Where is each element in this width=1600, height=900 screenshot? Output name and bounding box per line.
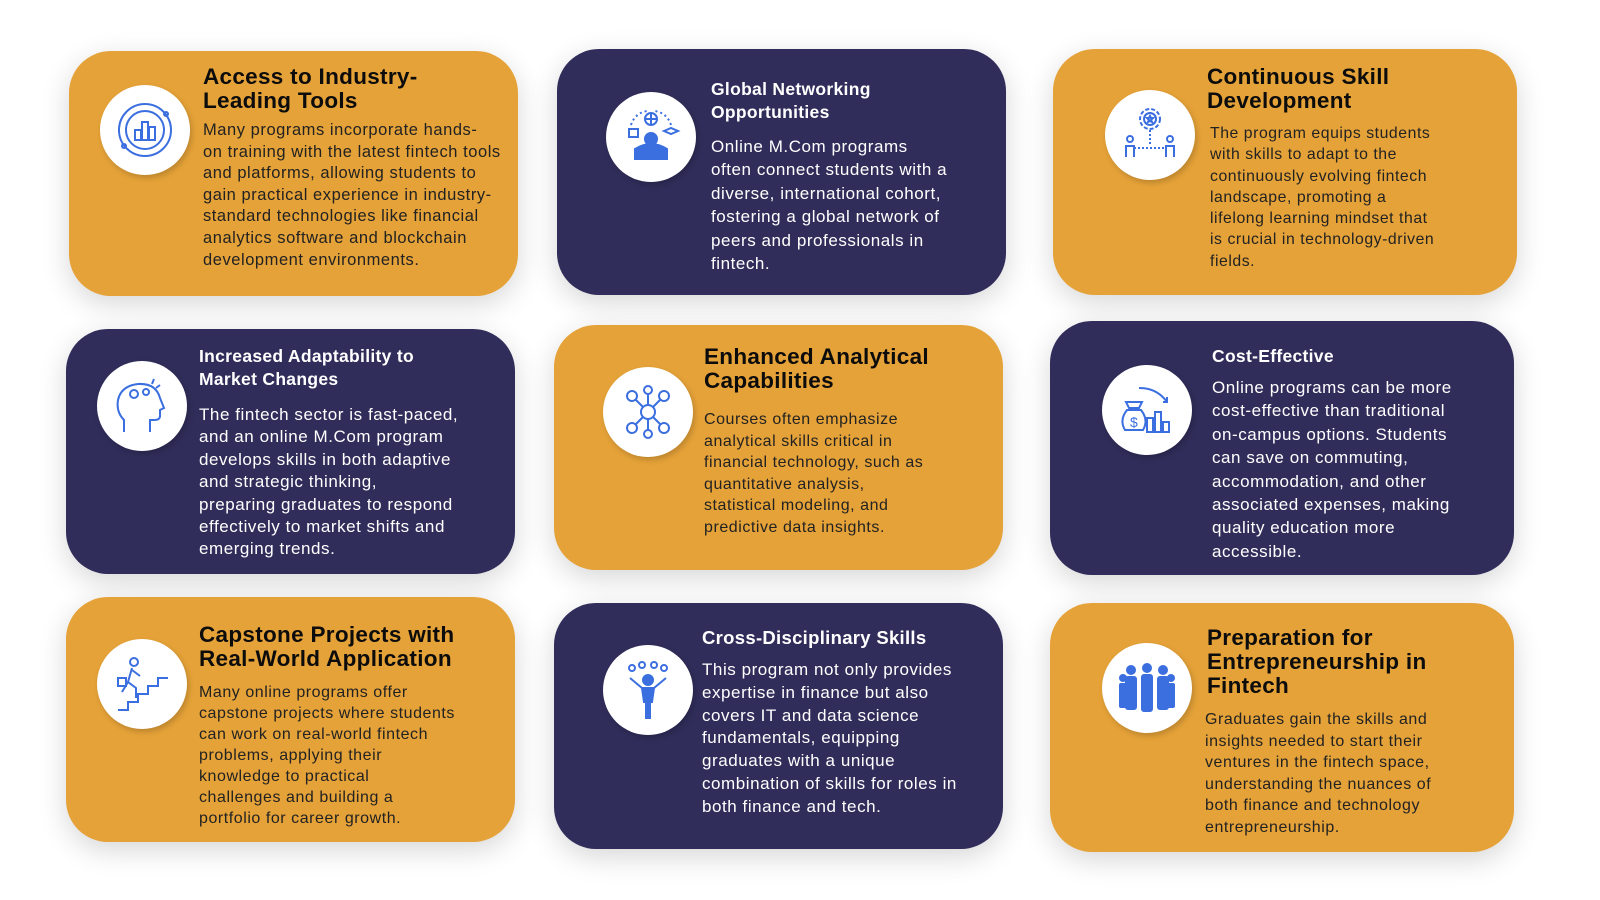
body text bbox=[704, 411, 923, 536]
title: Capabilities bbox=[704, 368, 834, 393]
card 4: Increased Adaptability bbox=[66, 329, 515, 574]
body text: can work on real-world fintech bbox=[199, 726, 428, 743]
body text: combination of skills for roles in bbox=[702, 774, 957, 793]
card 5: Enhanced Analytical Capabilities bbox=[554, 325, 1003, 570]
icon: head with ideas bbox=[97, 361, 187, 451]
body text: peers and professionals in bbox=[711, 231, 924, 250]
body text: standard technologies like financial bbox=[203, 207, 479, 225]
icon: skill gear with people bbox=[1105, 90, 1195, 180]
body text: insights needed to start their bbox=[1205, 733, 1423, 750]
body text bbox=[711, 137, 947, 273]
title bbox=[1207, 64, 1389, 113]
body text: Many online programs offer bbox=[199, 684, 408, 701]
body text: cost-effective than traditional bbox=[1212, 401, 1445, 420]
title: Global Networking bbox=[711, 79, 871, 99]
card 2: Global Networking Opportunities bbox=[557, 49, 1006, 295]
body text: development environments. bbox=[203, 251, 419, 269]
title bbox=[199, 346, 414, 389]
body text: financial technology, such as bbox=[704, 454, 923, 471]
title: Access to Industry- bbox=[203, 64, 418, 89]
body text: knowledge to practical bbox=[199, 768, 369, 785]
body text: Online programs can be more bbox=[1212, 378, 1452, 397]
body text: analytics software and blockchain bbox=[203, 229, 467, 247]
title: Market Changes bbox=[199, 369, 338, 389]
icon: team group bbox=[1102, 643, 1192, 733]
body text bbox=[702, 660, 957, 816]
icon: global networking bbox=[606, 92, 696, 182]
body text bbox=[1205, 711, 1431, 836]
body text bbox=[1212, 378, 1452, 561]
title: Real-World Application bbox=[199, 646, 452, 671]
body text: expertise in finance but also bbox=[702, 683, 929, 702]
title bbox=[711, 79, 871, 122]
body text: understanding the nuances of bbox=[1205, 776, 1431, 793]
card 7: Capstone Projects bbox=[66, 597, 515, 842]
card 1: Access to Industry-Leading Tools bbox=[69, 51, 518, 296]
body text: Courses often emphasize bbox=[704, 411, 898, 428]
icon: climbing stairs bbox=[97, 639, 187, 729]
body text: is crucial in technology-driven bbox=[1210, 231, 1434, 248]
body text: with skills to adapt to the bbox=[1210, 146, 1397, 163]
icon: person juggling skills bbox=[603, 645, 693, 735]
body text bbox=[203, 121, 501, 269]
title bbox=[203, 64, 418, 113]
body text: develops skills in both adaptive bbox=[199, 450, 451, 469]
title: Cross-Disciplinary Skills bbox=[702, 627, 926, 648]
title: Preparation for bbox=[1207, 625, 1373, 650]
body text: continuously evolving fintech bbox=[1210, 168, 1427, 185]
body text: The program equips students bbox=[1210, 125, 1430, 142]
card 9: Preparation for Entrepreneurship bbox=[1050, 603, 1514, 852]
icon: money bag and chart bbox=[1102, 365, 1192, 455]
title: Entrepreneurship in bbox=[1207, 649, 1426, 674]
title: Fintech bbox=[1207, 673, 1289, 698]
body text: emerging trends. bbox=[199, 539, 335, 558]
body text bbox=[199, 684, 455, 827]
body text: lifelong learning mindset that bbox=[1210, 210, 1428, 227]
icon: network of people bbox=[603, 367, 693, 457]
body text: challenges and building a bbox=[199, 789, 393, 806]
body text: and an online M.Com program bbox=[199, 427, 443, 446]
body text: entrepreneurship. bbox=[1205, 819, 1340, 836]
body text: Online M.Com programs bbox=[711, 137, 908, 156]
title: Capstone Projects with bbox=[199, 622, 454, 647]
title: Development bbox=[1207, 88, 1352, 113]
body text: diverse, international cohort, bbox=[711, 184, 941, 203]
title: Increased Adaptability to bbox=[199, 346, 414, 366]
body text: and platforms, allowing students to bbox=[203, 164, 476, 182]
body text: accessible. bbox=[1212, 542, 1302, 561]
body text: analytical skills critical in bbox=[704, 433, 892, 450]
body text: often connect students with a bbox=[711, 160, 947, 179]
card 8: Cross-Disciplinary Skills bbox=[554, 603, 1003, 849]
body text: both finance and technology bbox=[1205, 797, 1420, 814]
body text: capstone projects where students bbox=[199, 705, 455, 722]
body text: associated expenses, making bbox=[1212, 495, 1450, 514]
title bbox=[1207, 625, 1426, 698]
body text: and strategic thinking, bbox=[199, 472, 377, 491]
body text: The fintech sector is fast-paced, bbox=[199, 405, 458, 424]
card 3: Continuous Skill Development bbox=[1053, 49, 1517, 295]
title bbox=[704, 344, 929, 393]
icon: money bag and chart: $ bbox=[1130, 414, 1138, 430]
body text: fostering a global network of bbox=[711, 207, 940, 226]
body text: fintech. bbox=[711, 254, 770, 273]
body text: gain practical experience in industry- bbox=[203, 186, 492, 204]
body text: fundamentals, equipping bbox=[702, 728, 900, 747]
body text: ventures in the fintech space, bbox=[1205, 754, 1430, 771]
body text: fields. bbox=[1210, 253, 1255, 270]
title bbox=[199, 622, 454, 671]
body text: both finance and tech. bbox=[702, 797, 881, 816]
body text: preparing graduates to respond bbox=[199, 495, 453, 514]
title: Opportunities bbox=[711, 102, 830, 122]
body text: covers IT and data science bbox=[702, 706, 919, 725]
body text: graduates with a unique bbox=[702, 751, 895, 770]
title: Continuous Skill bbox=[1207, 64, 1389, 89]
body text: effectively to market shifts and bbox=[199, 517, 445, 536]
body text: on training with the latest fintech tools bbox=[203, 143, 501, 161]
body text bbox=[1210, 125, 1434, 270]
body text bbox=[199, 405, 458, 558]
title: Enhanced Analytical bbox=[704, 344, 929, 369]
body text: can save on commuting, bbox=[1212, 448, 1408, 467]
body text: statistical modeling, and bbox=[704, 497, 889, 514]
body text: Many programs incorporate hands- bbox=[203, 121, 477, 139]
body text: on-campus options. Students bbox=[1212, 425, 1447, 444]
icon: analytics chart bbox=[100, 85, 190, 175]
title: Cost-Effective bbox=[1212, 346, 1334, 366]
body text: predictive data insights. bbox=[704, 519, 885, 536]
body text: quantitative analysis, bbox=[704, 476, 865, 493]
body text: quality education more bbox=[1212, 518, 1395, 537]
body text: This program not only provides bbox=[702, 660, 952, 679]
body text: landscape, promoting a bbox=[1210, 189, 1386, 206]
title: Leading Tools bbox=[203, 88, 358, 113]
body text: Graduates gain the skills and bbox=[1205, 711, 1427, 728]
body text: accommodation, and other bbox=[1212, 472, 1426, 491]
body text: portfolio for career growth. bbox=[199, 810, 401, 827]
body text: problems, applying their bbox=[199, 747, 382, 764]
card 6: Cost-Effective bbox=[1050, 321, 1514, 575]
